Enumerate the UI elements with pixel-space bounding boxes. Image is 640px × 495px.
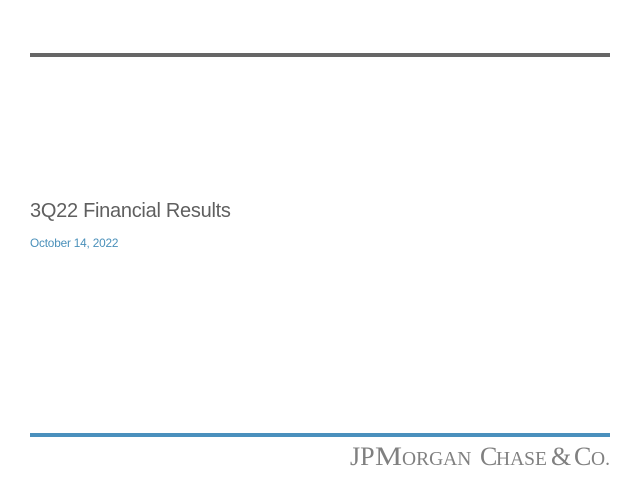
logo: JPMorgan Chase & Co.: O.	[591, 449, 610, 470]
logo: JPMorgan Chase & Co.	[350, 442, 610, 471]
logo: JPMorgan Chase & Co.: C	[574, 442, 591, 471]
date: October 14, 2022	[30, 236, 118, 250]
logo: JPMorgan Chase & Co.: &	[551, 442, 571, 471]
logo: JPMorgan Chase & Co.: JP	[350, 442, 375, 471]
logo: JPMorgan Chase & Co.: C	[480, 442, 497, 471]
logo: JPMorgan Chase & Co.: M	[375, 442, 402, 471]
bottom rule	[30, 433, 610, 437]
title: 3Q22 Financial Results	[30, 200, 231, 222]
logo: JPMorgan Chase & Co.: ORGAN	[402, 449, 471, 470]
top rule	[30, 53, 610, 57]
logo: JPMorgan Chase & Co.: HASE	[496, 449, 547, 470]
